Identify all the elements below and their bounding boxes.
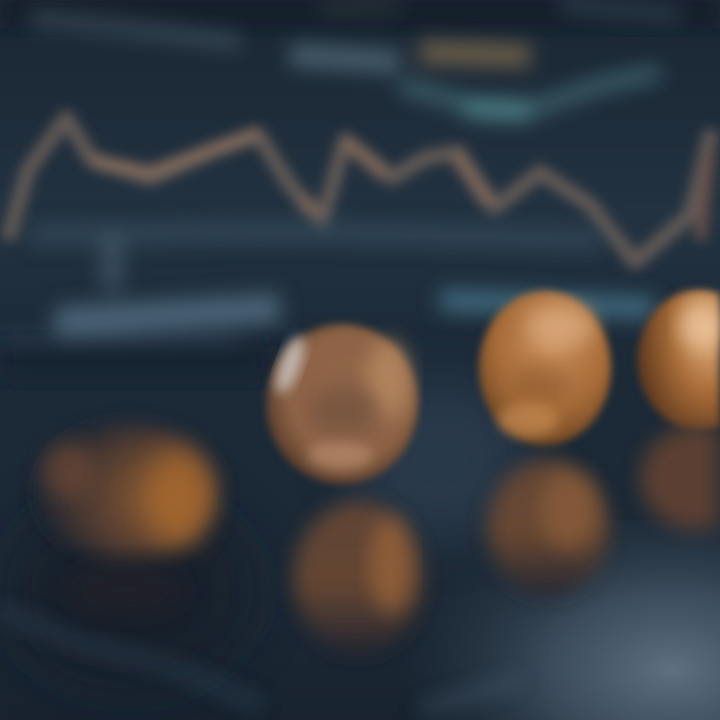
coin: third	[479, 291, 611, 445]
coin: right, cropped	[637, 290, 720, 430]
coin: left, out of focus	[40, 426, 216, 612]
chart: upper faint bands	[30, 5, 680, 112]
chart: lower data bands	[0, 232, 655, 710]
coin: right, reflection	[640, 426, 720, 530]
coin: second	[266, 324, 418, 484]
coin: third, reflection	[488, 460, 608, 596]
chart: main price line	[8, 118, 712, 262]
coin: second, reflection	[294, 502, 422, 654]
